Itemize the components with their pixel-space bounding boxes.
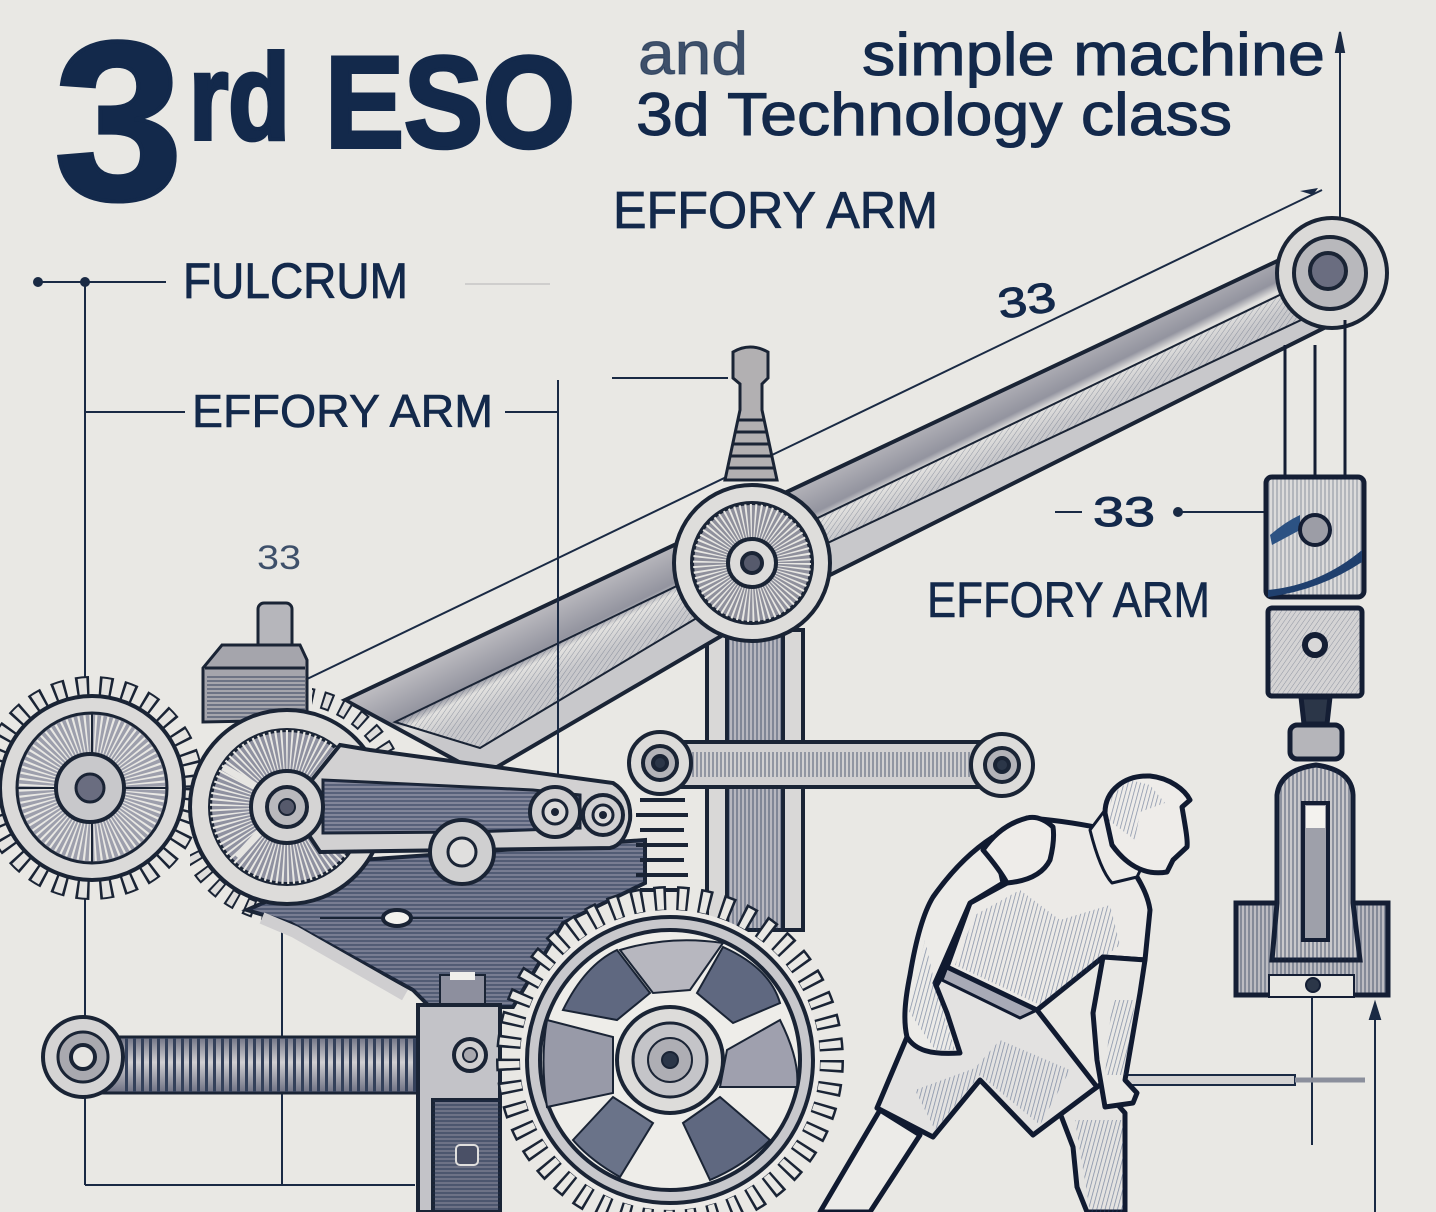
label: effory arm right: EFFORY ARM [927, 572, 1210, 628]
left arm [905, 837, 1003, 1053]
title: 3rd ESO: rd [189, 29, 290, 165]
small valve housing [203, 603, 307, 722]
bracket [418, 1005, 500, 1212]
left gear [0, 687, 193, 889]
column [707, 630, 803, 930]
upper clamp block [1266, 477, 1364, 597]
subtitle: simple machine [862, 21, 1325, 88]
dimension number: 33 right: 33 [1093, 488, 1155, 535]
right arm [1093, 957, 1145, 1107]
horizontal link [629, 732, 1033, 796]
label: fulcrum: FULCRUM [183, 253, 408, 309]
hidden rear gear teeth [180, 695, 400, 915]
torso [947, 818, 1150, 1010]
dimension number: 33 left: 33 [257, 539, 301, 577]
man leaning forward [820, 776, 1190, 1212]
screw rod [43, 1017, 418, 1097]
bar held by man [1120, 1075, 1365, 1085]
second wheel [190, 710, 384, 904]
subtitle: and [638, 20, 748, 87]
subtitle: 3d Technology class [636, 81, 1232, 148]
pivot wheel [674, 485, 830, 641]
label: effory arm left: EFFORY ARM [192, 385, 493, 437]
top pin [725, 347, 777, 480]
vertical dimension line over lever [557, 380, 559, 790]
label: effory arm top: EFFORY ARM [613, 182, 938, 240]
waistband [942, 967, 1037, 1018]
spring [636, 800, 688, 890]
title: 3rd ESO: 3 [54, 0, 183, 247]
head [1105, 776, 1190, 873]
big gear [509, 899, 831, 1212]
suspended load assembly [1236, 320, 1388, 997]
subtitle [636, 20, 1325, 148]
left sleeve [983, 817, 1054, 883]
lever arm [345, 255, 1340, 768]
neck [1090, 810, 1150, 883]
front leg [1060, 1085, 1125, 1212]
rear leg [820, 1110, 920, 1212]
title: 3rd ESO [54, 0, 575, 247]
end pulley [1277, 218, 1387, 328]
base frame plate [247, 840, 645, 1007]
linkage arm [251, 745, 630, 884]
title: 3rd ESO: ESO [325, 29, 575, 175]
dimension number: 33 on arm: 33 [995, 273, 1059, 328]
shorts [877, 967, 1097, 1137]
